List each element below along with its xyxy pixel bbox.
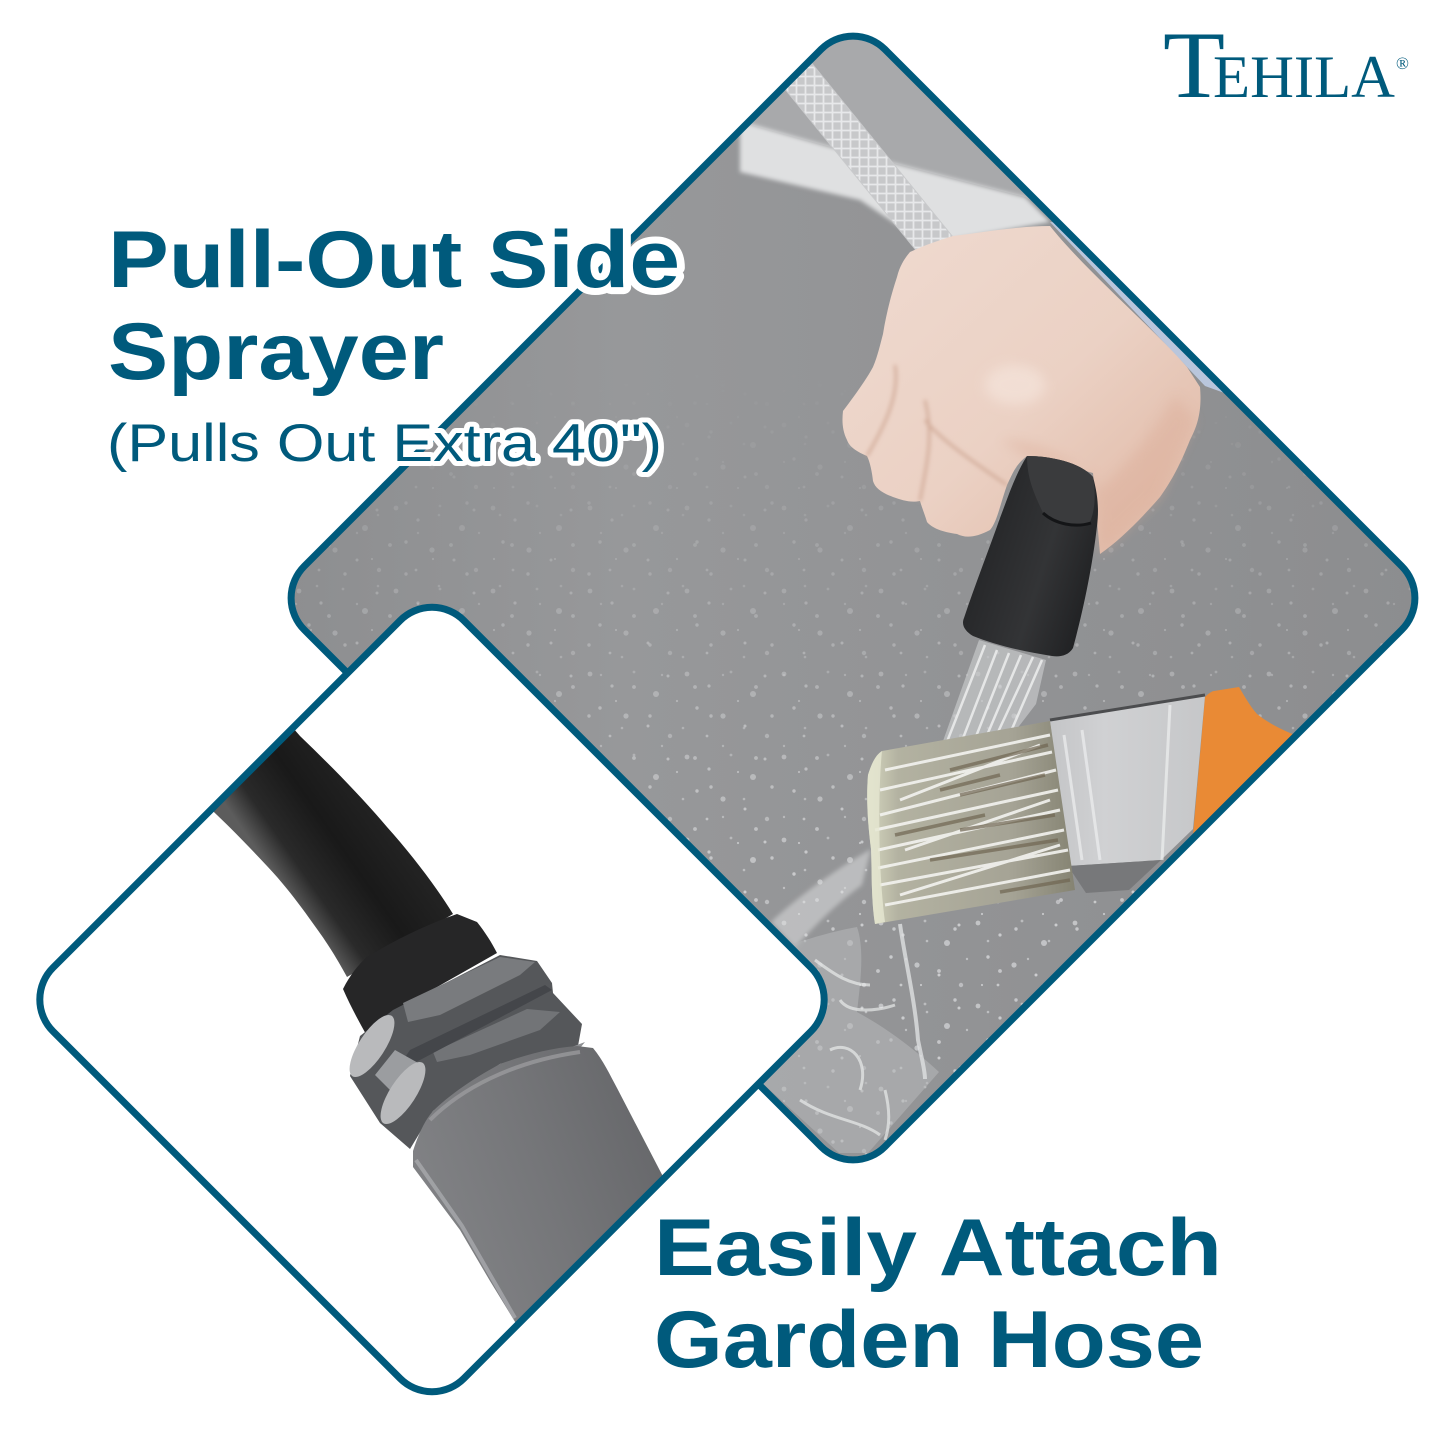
panel: garden hose attachment photo bbox=[21, 589, 843, 1410]
black hose bbox=[214, 730, 453, 977]
sleeve bbox=[1050, 222, 1230, 395]
braided hose bbox=[795, 72, 938, 248]
logo bbox=[1163, 12, 1409, 118]
sink basin background bbox=[280, 30, 1425, 1170]
logo: T bbox=[1163, 12, 1225, 118]
brush ferrule bbox=[1050, 696, 1205, 866]
logo: ® bbox=[1396, 54, 1409, 73]
hex nuts bbox=[341, 955, 585, 1149]
brush bristles bbox=[867, 721, 1075, 924]
water splash bbox=[761, 849, 939, 1153]
icon: black sprayer head bbox=[963, 456, 1098, 656]
subheading: pulls out extra 40 inches: (Pulls Out Extra 40") bbox=[107, 414, 662, 473]
big diamond outline bbox=[272, 17, 1434, 1179]
hand bbox=[842, 226, 1201, 554]
paint brush bbox=[867, 687, 1295, 924]
grey cone adapter bbox=[413, 1046, 670, 1330]
heading: pull-out side sprayer bbox=[108, 215, 680, 397]
water spray bbox=[944, 640, 1046, 740]
heading: easily attach garden hose: Easily Attach bbox=[654, 1203, 1222, 1293]
heading: pull-out side sprayer: Pull-Out Side bbox=[108, 215, 680, 305]
heading: pull-out side sprayer: Sprayer bbox=[108, 307, 444, 397]
heading: easily attach garden hose bbox=[654, 1203, 1222, 1385]
panel: pull-out side sprayer photo bbox=[272, 17, 1434, 1179]
brush handle bbox=[1193, 687, 1295, 835]
logo: EHILA bbox=[1213, 44, 1395, 110]
heading: easily attach garden hose: Garden Hose bbox=[654, 1295, 1204, 1385]
black collar bbox=[343, 914, 497, 1036]
